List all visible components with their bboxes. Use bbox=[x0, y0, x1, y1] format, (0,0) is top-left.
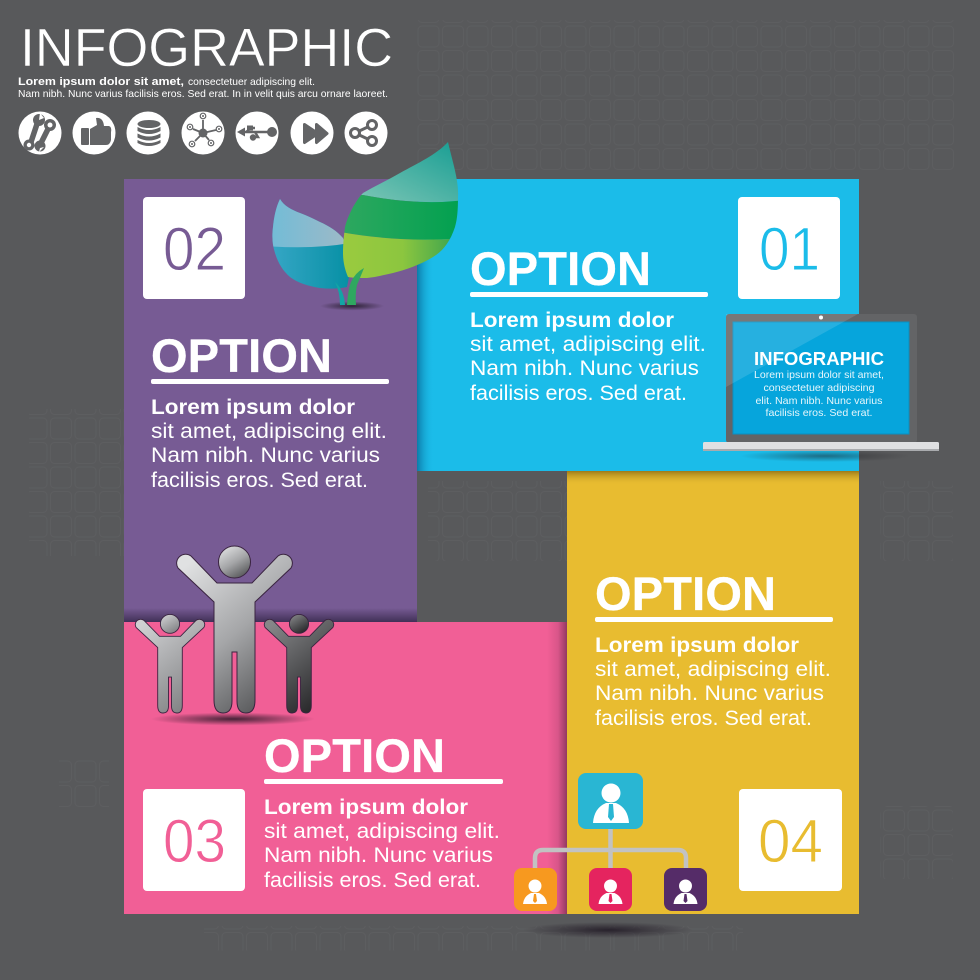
heading: OPTION bbox=[470, 242, 651, 295]
laptop screen text: INFOGRAPHIC bbox=[754, 349, 884, 369]
body text bbox=[595, 634, 831, 730]
panel: option 02 purple bbox=[124, 179, 417, 622]
heading: OPTION bbox=[595, 567, 776, 620]
body text: sit amet, adipiscing elit. bbox=[595, 658, 831, 681]
body text: sit amet, adipiscing elit. bbox=[264, 820, 500, 843]
icon: thumbs up bbox=[72, 112, 116, 154]
icon: fast forward bbox=[290, 112, 334, 154]
number box 01: 01 bbox=[759, 215, 820, 283]
laptop screen text: elit. Nam nibh. Nunc varius bbox=[756, 395, 882, 407]
body text: Lorem ipsum dolor bbox=[595, 634, 799, 657]
icon: people bbox=[135, 546, 334, 726]
body text bbox=[470, 309, 706, 405]
body text: Nam nibh. Nunc varius bbox=[264, 844, 493, 867]
header description: Lorem ipsum dolor sit amet, bbox=[18, 76, 184, 88]
org node orange bbox=[514, 868, 557, 911]
body text: sit amet, adipiscing elit. bbox=[470, 333, 706, 356]
org chart bbox=[514, 773, 707, 938]
body text: Nam nibh. Nunc varius bbox=[595, 682, 824, 705]
body text: facilisis eros. Sed erat. bbox=[151, 469, 368, 492]
icon: usb bbox=[236, 112, 278, 154]
body text: Lorem ipsum dolor bbox=[470, 309, 674, 332]
body text bbox=[151, 396, 387, 492]
person large bbox=[177, 546, 292, 713]
heading: OPTION bbox=[151, 329, 332, 382]
header description: Nam nibh. Nunc varius facilisis eros. Sed erat. In in velit quis arcu ornare laoreet. bbox=[18, 89, 388, 100]
header description: consectetuer adipiscing elit. bbox=[188, 77, 315, 88]
number box 03 bbox=[143, 789, 245, 891]
laptop screen text bbox=[754, 349, 884, 419]
header description bbox=[18, 76, 388, 100]
number box 01 bbox=[738, 197, 840, 299]
body text: Lorem ipsum dolor bbox=[264, 796, 468, 819]
person small right bbox=[264, 614, 334, 713]
icon: share bbox=[344, 112, 388, 154]
panel: option 04 yellow bbox=[567, 471, 859, 914]
panel: option 03 pink bbox=[124, 622, 567, 914]
number box 03: 03 bbox=[163, 807, 226, 875]
body text: facilisis eros. Sed erat. bbox=[470, 382, 687, 405]
org node pink bbox=[589, 868, 632, 911]
body text: facilisis eros. Sed erat. bbox=[264, 869, 481, 892]
laptop screen text: consectetuer adipiscing bbox=[764, 382, 875, 394]
laptop screen text: facilisis eros. Sed erat. bbox=[766, 407, 872, 419]
icon row bbox=[18, 112, 388, 154]
icon: network bbox=[182, 112, 224, 154]
number box 02 bbox=[143, 197, 245, 299]
number box 04: 04 bbox=[758, 807, 823, 875]
body text: Nam nibh. Nunc varius bbox=[470, 357, 699, 380]
body text: sit amet, adipiscing elit. bbox=[151, 420, 387, 443]
person small left bbox=[135, 614, 205, 713]
number box 04 bbox=[739, 789, 842, 891]
body text: Nam nibh. Nunc varius bbox=[151, 444, 380, 467]
body text bbox=[264, 796, 500, 892]
title: INFOGRAPHIC bbox=[20, 18, 393, 78]
org node top bbox=[578, 773, 643, 829]
icon: laptop bbox=[703, 314, 939, 462]
body text: facilisis eros. Sed erat. bbox=[595, 707, 812, 730]
number box 02: 02 bbox=[163, 215, 226, 283]
laptop screen text: Lorem ipsum dolor sit amet, bbox=[754, 369, 884, 381]
icon: leaves bbox=[272, 142, 458, 310]
body text: Lorem ipsum dolor bbox=[151, 396, 355, 419]
icon: tools bbox=[18, 112, 62, 154]
panel: option 01 blue bbox=[417, 179, 859, 471]
org node purple bbox=[664, 868, 707, 911]
icon: database bbox=[126, 112, 170, 154]
heading: OPTION bbox=[264, 729, 445, 782]
